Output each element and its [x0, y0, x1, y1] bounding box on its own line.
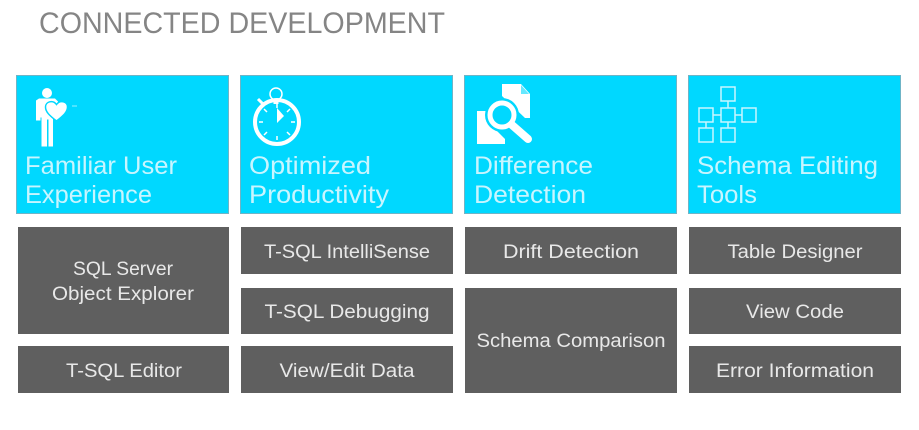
box: Table Designer — [689, 227, 901, 274]
box: View/Edit Data — [241, 346, 453, 393]
box: SQL Server Object Explorer: Object Explorer — [52, 284, 195, 305]
box: View Code: View Code — [746, 302, 844, 323]
panel: Optimized Productivity — [240, 76, 452, 214]
panel: Familiar User Experience — [16, 76, 228, 214]
box: Drift Detection — [465, 227, 677, 274]
box: T-SQL IntelliSense: T-SQL IntelliSense — [264, 242, 430, 263]
box: Error Information — [689, 346, 901, 393]
heading: Familiar User Experience: Experience — [25, 181, 152, 209]
heading: Difference Detection: Difference — [474, 152, 593, 180]
panel: Difference Detection — [464, 76, 676, 214]
box: SQL Server Object Explorer: SQL Server — [73, 259, 174, 280]
panel: Schema Editing Tools — [688, 76, 900, 214]
box: Schema Comparison: Schema Comparison — [476, 331, 666, 352]
title: CONNECTED DEVELOPMENT — [39, 7, 445, 40]
heading: Schema Editing Tools: Tools — [697, 181, 757, 209]
heading: Optimized Productivity: Optimized — [249, 152, 371, 180]
icon: schema diagram — [699, 87, 756, 142]
box: T-SQL Editor — [18, 346, 229, 393]
box: SQL Server Object Explorer — [18, 227, 229, 334]
box: View/Edit Data: View/Edit Data — [280, 361, 415, 382]
box: T-SQL Debugging — [241, 288, 453, 334]
box: Table Designer: Table Designer — [728, 242, 863, 263]
icon: stopwatch — [255, 88, 299, 144]
box: T-SQL IntelliSense — [241, 227, 453, 274]
box: T-SQL Debugging: T-SQL Debugging — [264, 302, 430, 323]
heading: Difference Detection: Detection — [474, 181, 586, 209]
box: T-SQL Editor: T-SQL Editor — [66, 361, 183, 382]
heading: Familiar User Experience: Familiar User — [25, 152, 177, 180]
box: View Code — [689, 288, 901, 334]
icon: person with heart — [36, 88, 77, 146]
heading: Optimized Productivity: Productivity — [249, 181, 390, 209]
icon: documents and magnifier — [477, 84, 530, 144]
heading: Schema Editing Tools: Schema Editing — [697, 152, 878, 180]
box: Schema Comparison — [465, 288, 677, 393]
box: Drift Detection: Drift Detection — [503, 242, 639, 263]
box: Error Information: Error Information — [716, 361, 874, 382]
